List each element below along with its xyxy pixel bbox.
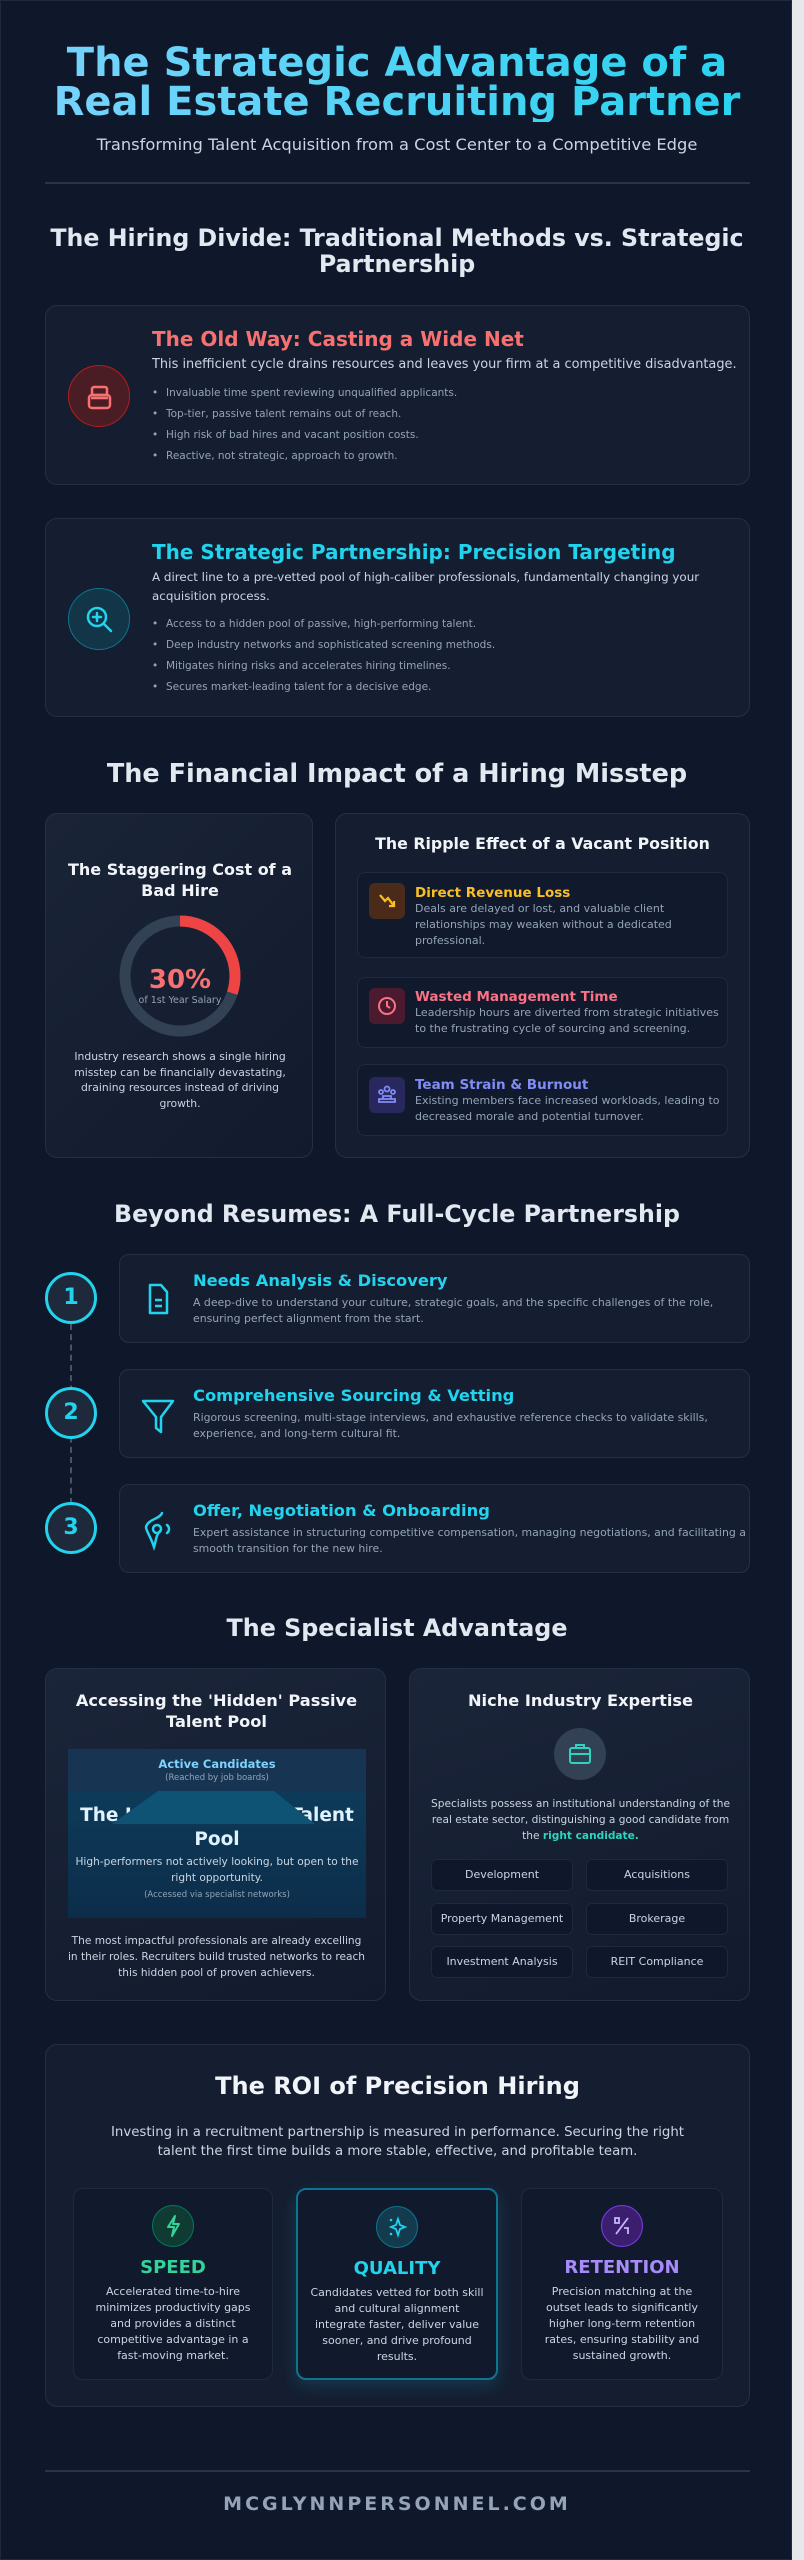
icon: clock <box>369 988 405 1024</box>
text: smooth transition for the new hire. <box>193 1542 383 1555</box>
panel: niche expertise: Investment Analysis <box>446 1955 558 1968</box>
icon: team <box>369 1077 405 1113</box>
ROI: speed: competitive advantage in a <box>97 2333 249 2346</box>
item: management time <box>357 977 728 1048</box>
ROI: retention: sustained growth. <box>573 2349 671 2362</box>
text: ensuring perfect alignment from the start. <box>193 1312 424 1325</box>
step 1 <box>45 1272 97 1324</box>
niche paragraph: Specialists possess an institutional understanding of the <box>431 1798 730 1810</box>
title: The Strategic Advantage of a <box>67 40 727 86</box>
partnership bullets: Access to a hidden pool of passive, high-performing talent. <box>166 618 476 630</box>
partnership description: acquisition process. <box>152 589 270 603</box>
panel: ROI <box>45 2044 750 2407</box>
item: revenue loss: Direct Revenue Loss <box>415 885 570 901</box>
heading: hiring divide <box>50 224 744 278</box>
step 3: 3 <box>63 1515 79 1540</box>
title: Real Estate Recruiting Partner <box>54 79 740 125</box>
ROI: speed: SPEED <box>140 2257 206 2278</box>
ROI: speed: Accelerated time-to-hire <box>106 2285 240 2298</box>
niche title: Niche Industry Expertise <box>468 1691 693 1710</box>
old way bullets: • <box>152 387 158 399</box>
pool title: Talent Pool <box>166 1712 267 1731</box>
panel: old way <box>45 305 750 485</box>
ROI: retention <box>521 2188 723 2380</box>
subtitle: Transforming Talent Acquisition from a Cost Center to a Competitive Edge <box>97 135 697 154</box>
pool diagram: (Reached by job boards) <box>165 1773 269 1783</box>
pool diagram: High-performers not actively looking, but open to the <box>75 1856 359 1868</box>
panel: strategic partnership <box>45 518 750 717</box>
text: Rigorous screening, multi-stage interviews, and exhaustive reference checks to validate skills, <box>193 1411 708 1424</box>
ROI paragraph: Investing in a recruitment partnership is measured in performance. Securing the right <box>111 2125 684 2140</box>
pool diagram: Active Candidates <box>158 1757 276 1771</box>
old way description: This inefficient cycle drains resources and leaves your firm at a competitive disadvantage. <box>152 357 737 372</box>
panel: niche expertise: REIT Compliance <box>611 1955 703 1968</box>
icon: handshake <box>144 1512 170 1551</box>
ROI: quality: sooner, and drive profound <box>322 2334 472 2347</box>
partnership description <box>152 570 700 603</box>
ROI paragraph <box>111 2125 684 2159</box>
icon: trend down <box>369 883 405 919</box>
partnership title: The Strategic Partnership: Precision Targeting <box>152 540 676 564</box>
niche paragraph: real estate sector, distinguishing a good candidate from <box>432 1814 729 1826</box>
partnership bullets: Secures market-leading talent for a decisive edge. <box>166 681 431 693</box>
icon: sparkle <box>376 2206 418 2248</box>
cost paragraph: misstep can be financially devastating, <box>74 1066 286 1079</box>
ROI title: The ROI of Precision Hiring <box>215 2072 580 2100</box>
ROI: speed: minimizes productivity gaps <box>95 2301 251 2314</box>
item: team strain: Existing members face increased workloads, leading to <box>415 1094 719 1107</box>
old way bullets: Reactive, not strategic, approach to growth. <box>166 450 398 462</box>
pool diagram: Pool <box>194 1829 240 1850</box>
cost title: Bad Hire <box>141 881 219 900</box>
panel: ripple effect <box>335 813 750 1158</box>
ROI: retention: Precision matching at the <box>552 2285 692 2298</box>
panel: cost of bad hire <box>45 813 313 1158</box>
old way bullets: • <box>152 450 158 462</box>
old way bullets: • <box>152 429 158 441</box>
step 3 <box>45 1502 97 1554</box>
partnership bullets: Mitigates hiring risks and accelerates hiring timelines. <box>166 660 451 672</box>
pool paragraph <box>68 1935 365 1979</box>
item: revenue loss: professional. <box>415 934 485 947</box>
panel: niche expertise: Acquisitions <box>624 1868 690 1881</box>
icon: magnifier <box>68 588 130 650</box>
panel: niche expertise: Property Management <box>441 1912 563 1925</box>
item: revenue loss: Deals are delayed or lost, and valuable client <box>415 902 664 915</box>
partnership bullets: • <box>152 618 158 630</box>
niche paragraph: the right candidate. <box>522 1830 639 1842</box>
step 2: 2 <box>63 1400 79 1425</box>
panel: niche expertise: Brokerage <box>629 1912 685 1925</box>
title <box>1 44 793 122</box>
ROI: quality: integrate faster, deliver value <box>315 2318 479 2331</box>
ROI: quality: and cultural alignment <box>335 2302 459 2315</box>
tags: Development <box>465 1868 539 1881</box>
item: revenue loss: relationships may weaken without a dedicated <box>415 918 672 931</box>
ROI: speed: fast-moving market. <box>117 2349 229 2362</box>
heading: full cycle: Beyond Resumes: A Full-Cycle Partnership <box>114 1200 680 1228</box>
cost paragraph: Industry research shows a single hiring <box>74 1050 286 1063</box>
pool title: Accessing the 'Hidden' Passive <box>76 1691 357 1710</box>
ROI: quality: Candidates vetted for both skill <box>310 2286 484 2299</box>
ROI paragraph: talent the first time builds a more stable, effective, and profitable team. <box>158 2144 637 2159</box>
cost paragraph <box>74 1050 286 1110</box>
old way title: The Old Way: Casting a Wide Net <box>152 327 524 351</box>
niche paragraph <box>431 1798 730 1842</box>
partnership bullets: • <box>152 639 158 651</box>
step 1: 1 <box>63 1285 79 1310</box>
old way bullets: • <box>152 408 158 420</box>
text: experience, and long-term cultural fit. <box>193 1427 400 1440</box>
partnership description: A direct line to a pre-vetted pool of high-caliber professionals, fundamentally changing your <box>152 570 699 584</box>
text: A deep-dive to understand your culture, strategic goals, and the specific challenges of the role, <box>193 1296 713 1309</box>
ROI: retention: higher long-term retention <box>549 2317 695 2330</box>
text: Offer, Negotiation & Onboarding <box>193 1501 490 1520</box>
donut chart <box>120 916 240 1036</box>
icon: bolt <box>152 2205 194 2247</box>
item: management time: to the frustrating cycle of sourcing and screening. <box>415 1022 690 1035</box>
partnership bullets <box>152 618 495 693</box>
ripple heading: The Ripple Effect of a Vacant Position <box>375 834 710 853</box>
item: team strain <box>357 1064 728 1136</box>
text: Needs Analysis & Discovery <box>193 1271 448 1290</box>
heading: financial impact: The Financial Impact of a Hiring Misstep <box>107 759 687 789</box>
footer: MCGLYNNPERSONNEL.COM <box>223 2493 571 2515</box>
old way bullets: Invaluable time spent reviewing unqualified applicants. <box>166 387 457 399</box>
panel: hidden talent pool <box>45 1668 386 2001</box>
heading: specialist advantage: The Specialist Advantage <box>227 1614 567 1642</box>
item: revenue loss <box>357 872 728 958</box>
partnership bullets: Deep industry networks and sophisticated screening methods. <box>166 639 495 651</box>
tags <box>431 1859 573 1891</box>
pool diagram: right opportunity. <box>171 1872 263 1884</box>
donut chart: of 1st Year Salary <box>139 995 221 1006</box>
old way bullets <box>152 387 457 462</box>
ROI: speed <box>73 2188 273 2380</box>
timeline connector <box>70 1324 72 1504</box>
ROI: retention: rates, ensuring stability and <box>545 2333 699 2346</box>
partnership bullets: • <box>152 681 158 693</box>
item: team strain: decreased morale and potential turnover. <box>415 1110 644 1123</box>
pool title <box>76 1691 357 1731</box>
step 2 <box>45 1387 97 1439</box>
pool diagram: The Hidden Passive Talent <box>80 1805 354 1826</box>
pool diagram: (Accessed via specialist networks) <box>144 1890 290 1900</box>
cost paragraph: growth. <box>160 1097 200 1110</box>
heading: hiring divide: The Hiring Divide: Traditional Methods vs. Strategic <box>50 224 744 252</box>
old way bullets: High risk of bad hires and vacant position costs. <box>166 429 419 441</box>
ROI: retention: RETENTION <box>564 2257 680 2278</box>
text: Comprehensive Sourcing & Vetting <box>193 1386 514 1405</box>
ROI: speed: and provides a distinct <box>110 2317 236 2330</box>
pool paragraph: in their roles. Recruiters build trusted networks to reach <box>68 1951 365 1963</box>
icon: funnel <box>142 1400 174 1434</box>
item: team strain: Team Strain & Burnout <box>415 1077 588 1093</box>
item: management time: Wasted Management Time <box>415 989 618 1005</box>
cost title: The Staggering Cost of a <box>68 860 292 879</box>
pool diagram <box>68 1749 366 1918</box>
heading: hiring divide: Partnership <box>319 250 475 278</box>
pool paragraph: this hidden pool of proven achievers. <box>118 1967 315 1979</box>
ROI: quality <box>296 2188 498 2380</box>
text: Expert assistance in structuring competitive compensation, managing negotiations, and facilitating a <box>193 1526 746 1539</box>
icon: document <box>148 1284 168 1314</box>
cost title <box>68 860 292 900</box>
item: management time: Leadership hours are diverted from strategic initiatives <box>415 1006 719 1019</box>
icon: old way <box>68 365 130 427</box>
pool paragraph: The most impactful professionals are already excelling <box>72 1935 361 1947</box>
donut chart: 30% <box>149 965 211 995</box>
ROI: quality: results. <box>377 2350 417 2363</box>
partnership bullets: • <box>152 660 158 672</box>
icon: percent <box>601 2205 643 2247</box>
old way bullets: Top-tier, passive talent remains out of reach. <box>166 408 401 420</box>
icon: briefcase <box>554 1728 606 1780</box>
ROI: quality: QUALITY <box>354 2258 440 2279</box>
cost paragraph: draining resources instead of driving <box>81 1081 279 1094</box>
panel: niche expertise <box>409 1668 750 2001</box>
ROI: retention: outset leads to significantly <box>546 2301 698 2314</box>
